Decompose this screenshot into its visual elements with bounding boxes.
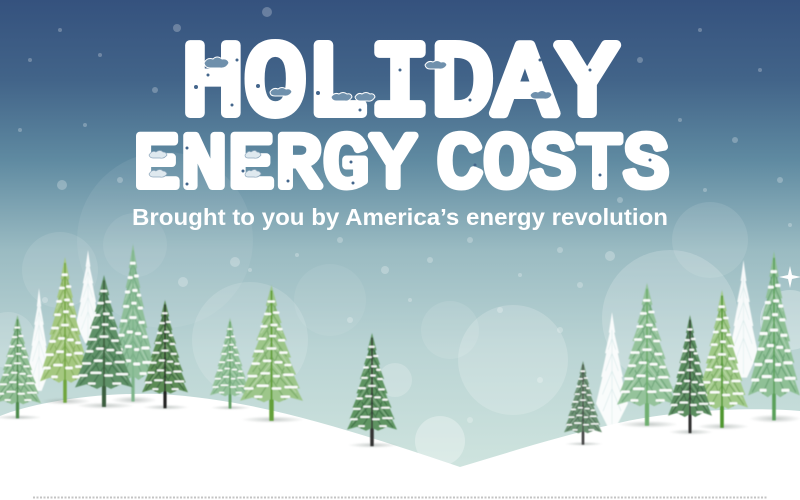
bokeh circles	[0, 152, 800, 466]
snowy ground	[0, 394, 800, 500]
left group of fir trees	[0, 244, 304, 423]
title line 1: HOLIDAY	[182, 27, 618, 144]
title line 2 right: COSTS	[437, 123, 669, 209]
back row white trees	[28, 250, 758, 428]
sparkle	[779, 266, 800, 288]
dotted divider	[33, 496, 767, 498]
title line 2 left: ENERGY	[134, 123, 416, 209]
right group of fir trees	[564, 251, 800, 446]
title snow speckles and drifts	[149, 57, 652, 186]
centre fir tree	[347, 333, 398, 448]
subtitle: Brought to you by America’s energy revolution	[132, 204, 668, 230]
